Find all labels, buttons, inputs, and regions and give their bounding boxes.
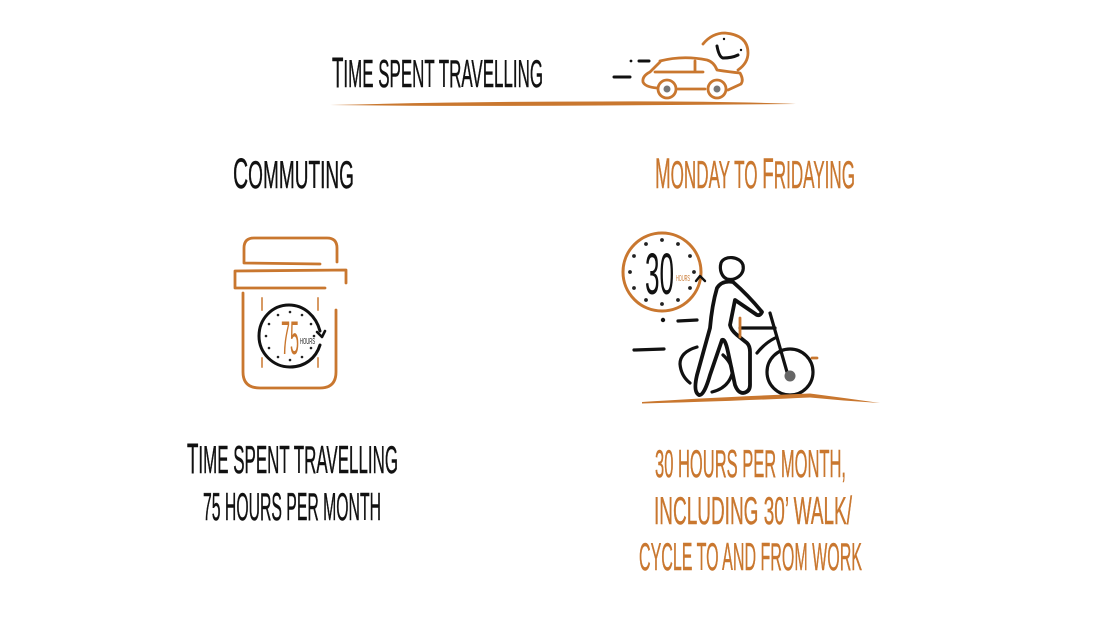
text: TIME SPENT TRAVELLING xyxy=(187,435,398,483)
icon: cyclist with clock: 30 xyxy=(645,242,674,307)
icon: jar with clock: 75 xyxy=(281,311,299,364)
text: 30 HOURS PER MONTH, xyxy=(655,443,846,486)
heading: Monday to Fridaying: MONDAY TO FRIDAYING xyxy=(655,150,855,198)
text: 75 HOURS PER MONTH xyxy=(203,486,381,529)
text: commuting time xyxy=(187,435,398,529)
icon: jar with clock xyxy=(235,238,346,388)
icon: jar with clock: HOURS xyxy=(300,337,315,346)
heading: commuting: COMMUTING xyxy=(233,150,354,198)
icon: cyclist with clock xyxy=(623,233,880,404)
title underline xyxy=(330,101,796,106)
text: TIME SPENT TRAVELLING xyxy=(332,49,543,97)
text: Monday to Fridaying time: INCLUDING 30’ WALK/ xyxy=(654,490,852,533)
icon: cyclist with clock: HOURS xyxy=(676,274,690,283)
icon: car with clock xyxy=(614,33,748,98)
text: Monday to Fridaying time xyxy=(639,443,862,579)
